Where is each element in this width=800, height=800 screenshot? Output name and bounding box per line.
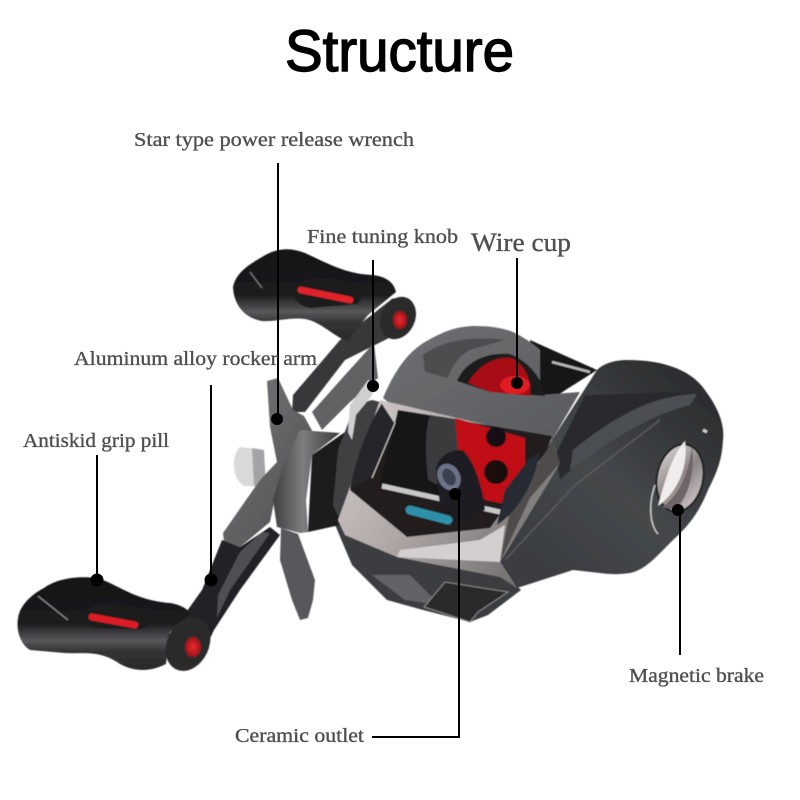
chrome front frame [338, 400, 560, 588]
silver nut [234, 447, 266, 487]
leader: ceramic outlet [372, 488, 461, 737]
side collar cylinder [273, 430, 340, 533]
lower hub with red cap [157, 610, 219, 678]
lower grip [18, 577, 190, 670]
upper handle arm [292, 298, 412, 430]
silver knob and neck [333, 380, 380, 520]
dark interior window [350, 403, 552, 537]
level wind bar and blue line [382, 486, 500, 520]
fishing reel illustration [18, 249, 723, 678]
title: Structure [285, 19, 514, 84]
magnetic brake knob [649, 430, 711, 534]
upper hub with red cap [373, 291, 423, 345]
red spool seen through top opening [457, 354, 545, 396]
label: star wrench: Star type power release wrench [134, 129, 414, 151]
lower handle arm [172, 527, 280, 660]
leader: magnetic brake [672, 504, 684, 655]
label: aluminum rocker arm: Aluminum alloy rocker arm [74, 348, 317, 370]
gray top frame [383, 326, 580, 440]
label: wire cup: Wire cup [471, 228, 571, 257]
label: magnetic brake: Magnetic brake [629, 665, 764, 687]
leader: wire cup [511, 258, 523, 389]
label: fine tuning knob: Fine tuning knob [307, 227, 458, 248]
base and foot of the reel [333, 500, 521, 622]
line channel right of the spool [530, 340, 597, 398]
red gear inside window [455, 418, 540, 525]
black spacer behind collar [308, 432, 358, 532]
leader: antiskid grip [90, 455, 104, 586]
label: antiskid grip: Antiskid grip pill [23, 430, 169, 452]
label: ceramic outlet: Ceramic outlet [235, 725, 364, 747]
star wrench [223, 378, 320, 620]
leader: fine tuning knob [367, 260, 379, 392]
leader: aluminum rocker arm [204, 385, 218, 586]
line guide ceramic outlet [432, 450, 485, 520]
dark side plate [500, 360, 723, 588]
leader: star wrench [271, 163, 283, 425]
upper grip [233, 249, 396, 341]
